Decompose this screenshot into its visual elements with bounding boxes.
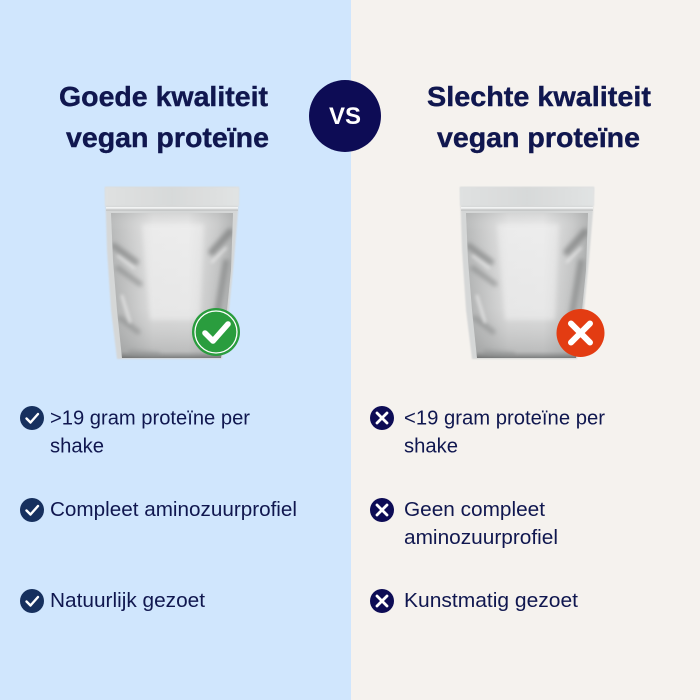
list item: geen compleet aminozuurprofiel: aminozuurprofiel (404, 527, 558, 549)
heading: slechte kwaliteit: Slechte kwaliteit (427, 81, 651, 112)
list item: under 19 gram: shake (404, 436, 458, 458)
vs badge: VS (329, 103, 361, 130)
list item: natuurlijk gezoet: Natuurlijk gezoet (50, 590, 205, 612)
list item: under 19 gram: <19 gram proteïne per (404, 408, 605, 430)
list item: compleet aminozuurprofiel: Compleet aminozuurprofiel (50, 499, 297, 521)
image: pouch with red cross (460, 187, 604, 360)
icon: green check badge (192, 308, 240, 356)
heading: goede kwaliteit: Goede kwaliteit (59, 81, 268, 112)
vs badge (309, 80, 381, 152)
panel: slechte kwaliteit (351, 0, 700, 700)
list item: kunstmatig gezoet: Kunstmatig gezoet (404, 590, 578, 612)
panel: goede kwaliteit (0, 0, 351, 700)
list item: geen compleet aminozuurprofiel (370, 498, 558, 549)
icon: red cross badge (556, 309, 604, 357)
heading: slechte kwaliteit (427, 81, 651, 153)
heading: slechte kwaliteit: vegan proteïne (437, 122, 640, 153)
heading: goede kwaliteit (59, 81, 269, 153)
list item: over 19 gram: shake (50, 436, 104, 458)
list item: under 19 gram (370, 406, 605, 458)
image: pouch with green check (105, 187, 240, 360)
list item: over 19 gram (20, 406, 250, 458)
heading: goede kwaliteit: vegan proteïne (66, 122, 269, 153)
list item: geen compleet aminozuurprofiel: Geen compleet (404, 499, 545, 521)
list item: over 19 gram: >19 gram proteïne per (50, 408, 250, 430)
